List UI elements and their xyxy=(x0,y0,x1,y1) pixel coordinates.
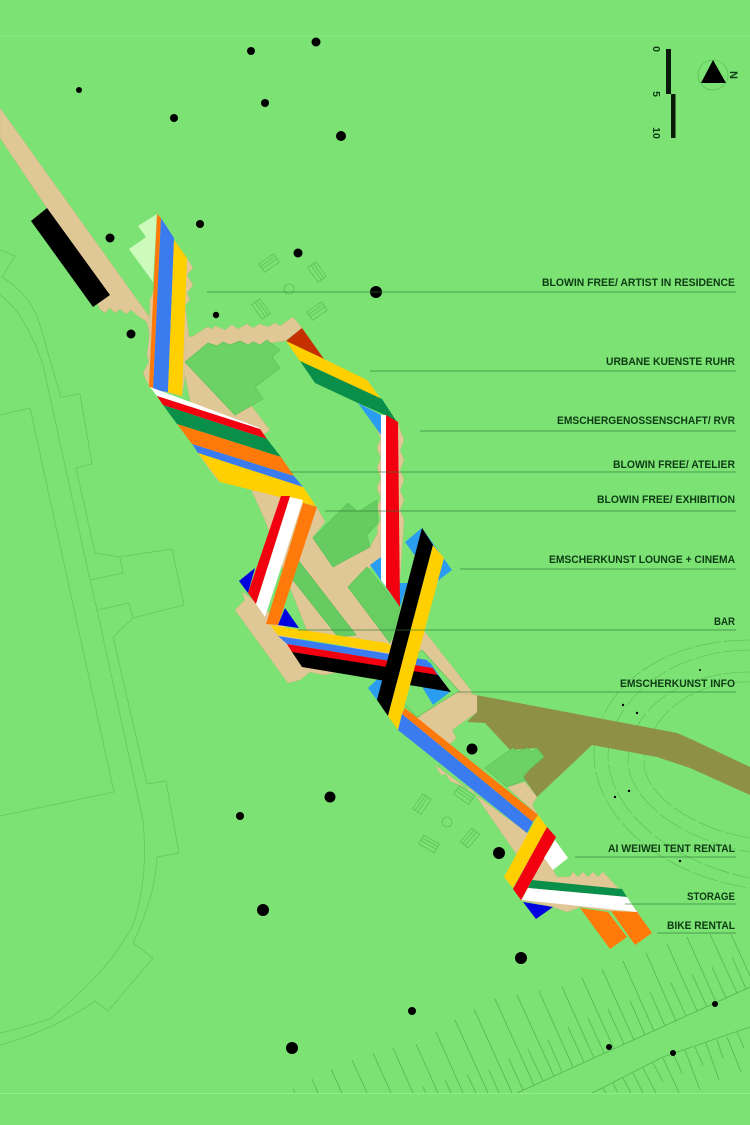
benches and markers south xyxy=(413,786,480,853)
stadium outline xyxy=(0,250,184,1045)
ribbon: storage xyxy=(522,880,637,919)
ribbon: artist in residence xyxy=(149,214,187,396)
ribbon: urbane kuenste xyxy=(286,328,397,435)
label: tent rental: AI WEIWEI TENT RENTAL xyxy=(608,843,735,855)
info courtyard xyxy=(400,650,459,717)
label: lounge and cinema: EMSCHERKUNST LOUNGE + CINEMA xyxy=(549,554,735,566)
ribbon: atelier band xyxy=(150,387,316,506)
pale green building xyxy=(129,214,157,282)
ribbon: emscherkunst lounge xyxy=(377,528,444,730)
label: urbane kuenste ruhr: URBANE KUENSTE RUHR xyxy=(606,356,735,368)
leader lines xyxy=(207,292,736,933)
label: atelier: BLOWIN FREE/ ATELIER xyxy=(613,459,735,471)
trees xyxy=(76,38,718,1056)
light blue crossing blocks xyxy=(368,528,452,705)
green plots xyxy=(185,340,544,787)
label: emschergenossenschaft: EMSCHERGENOSSENSCHAFT/ RVR xyxy=(557,415,735,427)
running track arcs xyxy=(594,640,750,888)
scale bar: 10 xyxy=(650,127,662,139)
scale bar: 5 xyxy=(650,91,662,97)
scale bar: 0 xyxy=(650,46,662,52)
black building xyxy=(31,208,110,307)
ribbon: bar xyxy=(270,625,451,692)
ribbon: exhibition xyxy=(239,496,317,628)
bike rental blocks xyxy=(580,908,652,949)
label: exhibition: BLOWIN FREE/ EXHIBITION xyxy=(597,494,735,506)
scale bar xyxy=(650,46,676,139)
label: bike rental: BIKE RENTAL xyxy=(667,920,735,932)
olive access road xyxy=(467,695,750,797)
ribbon: emschergenossenschaft xyxy=(381,415,400,607)
parking hatching xyxy=(293,934,750,1093)
label: artist in residence: BLOWIN FREE/ ARTIST IN RESIDENCE xyxy=(542,277,735,289)
tan walkway network xyxy=(0,108,640,915)
label: info: EMSCHERKUNST INFO xyxy=(620,678,735,690)
ribbon: tent rental xyxy=(504,815,568,900)
north arrow xyxy=(698,60,739,90)
ribbon: emscherkunst info xyxy=(398,708,538,833)
benches and markers north xyxy=(252,254,327,320)
label: bar: BAR xyxy=(714,616,735,628)
north arrow: N xyxy=(727,71,739,79)
label: storage: STORAGE xyxy=(687,891,735,903)
